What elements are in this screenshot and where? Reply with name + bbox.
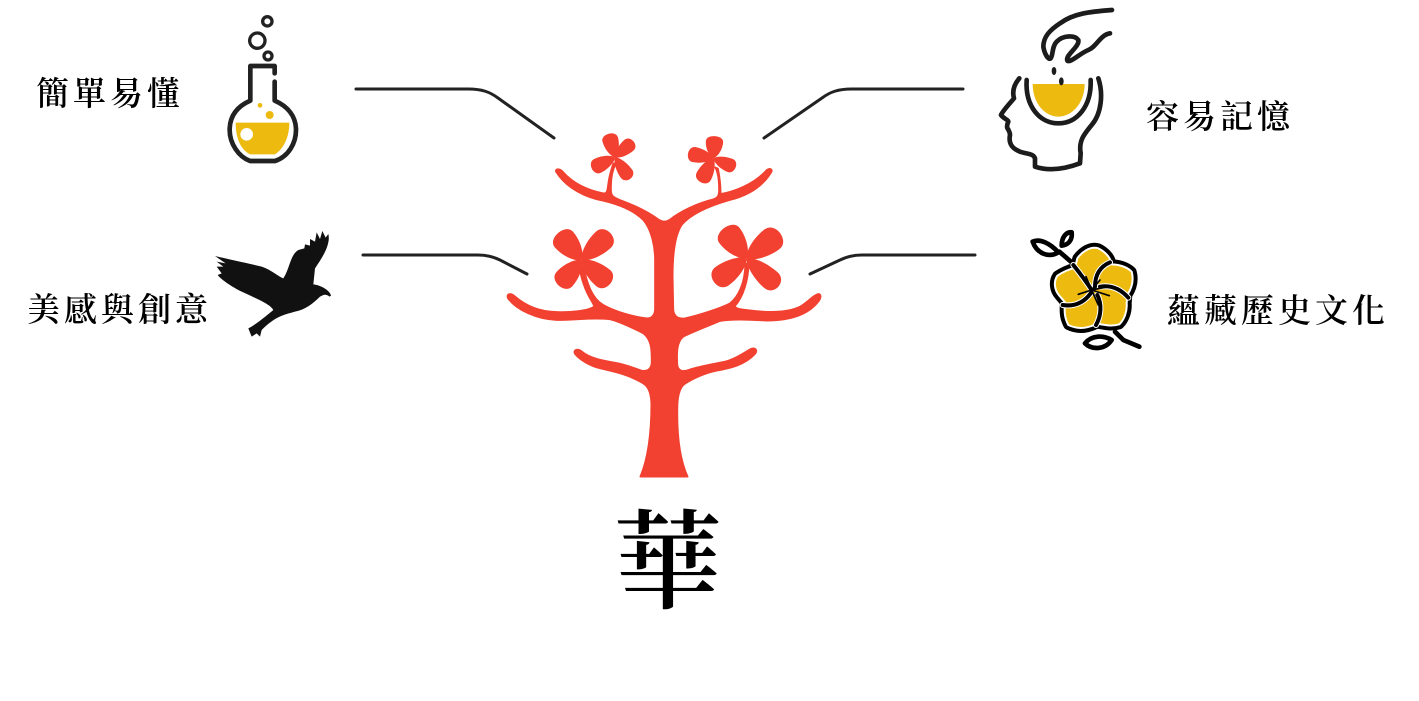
flower: lower left [549, 225, 618, 293]
title character: 華: 華 [614, 505, 722, 624]
label: 美感與創意: 美感與創意 [27, 292, 212, 329]
label: 簡單易懂: 簡單易懂 [36, 76, 184, 113]
connector: lower right [810, 255, 975, 274]
icon: eagle [215, 231, 331, 337]
tree trunk and branches [507, 163, 821, 477]
connector: top right [764, 89, 963, 138]
label: 蘊藏歷史文化: 蘊藏歷史文化 [1167, 293, 1389, 330]
icon: hibiscus flower [1033, 232, 1139, 348]
connector: top left [356, 89, 554, 138]
connector: lower left [363, 255, 527, 274]
tree: red flowering tree [507, 132, 821, 477]
flower: lower right [707, 221, 788, 294]
flower: upper left [589, 132, 638, 183]
label: 容易記憶: 容易記憶 [1146, 99, 1294, 136]
icon: head with hand [1001, 10, 1112, 169]
icon: flask [230, 17, 296, 161]
flower: upper right [687, 136, 738, 186]
